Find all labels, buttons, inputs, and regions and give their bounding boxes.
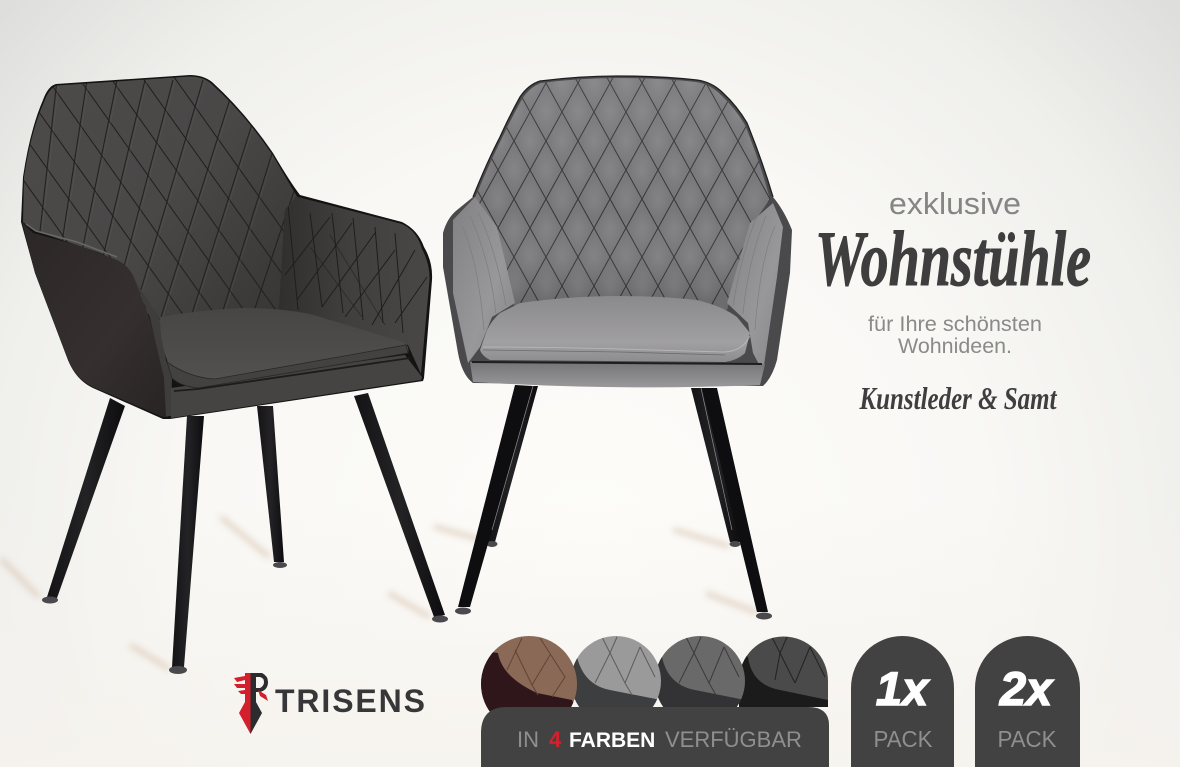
text: für Ihre schönsten: für Ihre schönsten: [868, 313, 1042, 336]
chair left outer shell: [22, 222, 168, 417]
chair inner arm strip: [136, 282, 172, 416]
text: IN 4 FARBEN VERFÜGBAR: FARBEN: [569, 729, 655, 752]
chair back velvet lattice: [23, 76, 297, 325]
chair silhouette with piping: [443, 76, 792, 386]
arm stitching: [462, 212, 775, 330]
chair right arm velvet: [279, 196, 430, 374]
chair back velvet lattice: [475, 78, 770, 310]
text: Wohnideen.: Wohnideen.: [898, 335, 1012, 358]
text: Kunstleder & Samt: Kunstleder & Samt: [859, 380, 1057, 416]
text: TRISENS: TRISENS: [275, 683, 425, 719]
swatch: light grey: [574, 636, 661, 707]
chair legs: [42, 393, 448, 674]
text: PACK: PACK: [998, 726, 1057, 752]
chair seat cushion: [480, 296, 750, 362]
chair front band: [171, 355, 422, 418]
text: IN 4 FARBEN VERFÜGBAR: 4: [549, 727, 562, 752]
swatch: black: [739, 636, 828, 707]
text: PACK: PACK: [874, 726, 933, 752]
chair legs: [455, 385, 772, 620]
chair right arm velvet: [727, 203, 783, 372]
shell piping: [26, 224, 117, 257]
badge: 2x pack: [975, 636, 1080, 767]
swatch: brown: [481, 636, 577, 712]
panel: colour availability: [481, 707, 829, 767]
chair front band: [470, 362, 765, 387]
text: exklusive: exklusive: [889, 186, 1021, 221]
chair: dark grey, angled: [0, 70, 448, 674]
chair left arm velvet: [453, 197, 515, 363]
icon: sword monogram: [234, 673, 268, 734]
chair silhouette with piping: [21, 75, 432, 419]
chair seat cushion: [160, 308, 408, 381]
chair: medium grey, front view: [443, 76, 792, 620]
colour swatches: [478, 630, 835, 767]
text: 2x: 2x: [999, 662, 1054, 715]
back piping: [473, 76, 773, 197]
text: 1x: 1x: [876, 662, 930, 715]
swatch: dark grey: [658, 636, 745, 707]
floor shadows: [2, 518, 756, 668]
heading text block: [815, 186, 1091, 416]
badge: 1x pack: [851, 636, 954, 767]
text: IN 4 FARBEN VERFÜGBAR: IN: [517, 727, 539, 752]
text: IN 4 FARBEN VERFÜGBAR: VERFÜGBAR: [665, 727, 802, 752]
logo: TRISENS: [234, 673, 425, 734]
